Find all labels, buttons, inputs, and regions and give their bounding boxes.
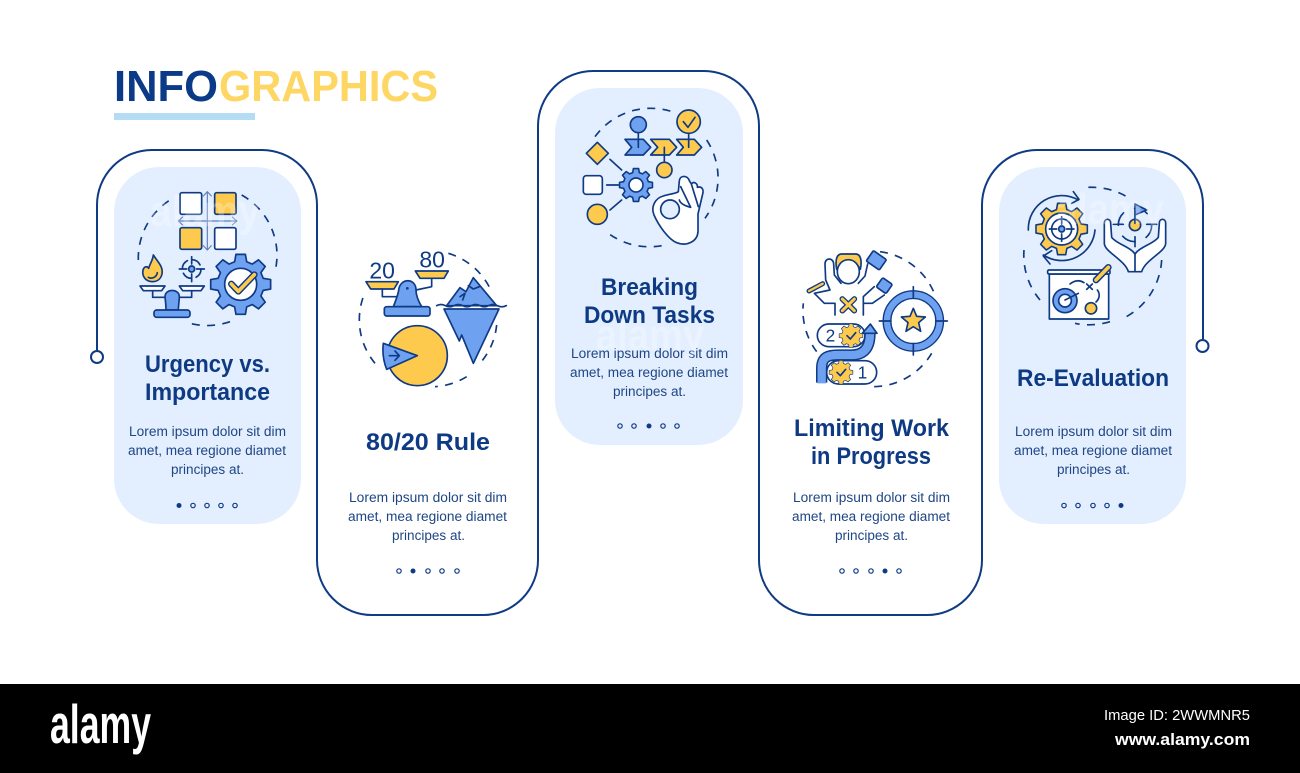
icon: multitasking person, steps and target: 1	[858, 362, 867, 382]
panel: 80/20 rule	[348, 246, 507, 574]
text block: amet, mea regione diamet	[348, 509, 507, 524]
outline end dot	[1196, 340, 1208, 352]
text block: amet, mea regione diamet	[1014, 443, 1172, 458]
footer band	[0, 684, 1300, 773]
text block: Lorem ipsum dolor sit dim	[129, 424, 286, 439]
heading	[794, 415, 950, 470]
text block: Lorem ipsum dolor sit dim	[1015, 424, 1172, 439]
icon: multitasking person, steps and target: 2	[826, 326, 835, 346]
watermarks: alamy	[150, 187, 260, 236]
watermarks: alamy	[596, 311, 704, 360]
title	[114, 62, 438, 111]
text block	[348, 490, 507, 543]
text block: Lorem ipsum dolor sit dim	[793, 490, 950, 505]
text block: amet, mea regione diamet	[128, 443, 286, 458]
text block: Lorem ipsum dolor sit dim	[571, 346, 728, 361]
heading: Urgency vs.	[145, 351, 270, 378]
connecting outline	[97, 71, 1203, 615]
pagination dots	[397, 568, 459, 574]
icon: process flow, gear and ok hand	[583, 108, 718, 247]
text block: principes at.	[1057, 462, 1130, 477]
text block	[570, 346, 728, 399]
panel: urgency vs importance	[114, 167, 301, 524]
text block	[128, 424, 286, 477]
title: GRAPHICS	[219, 62, 438, 111]
image id: Image ID: 2WWMNR5	[1104, 707, 1250, 724]
panel: limiting work in progress	[792, 251, 950, 574]
icon: priority matrix, scale and gear	[138, 192, 277, 326]
pagination dots	[618, 424, 679, 428]
heading: Limiting Work	[794, 415, 950, 442]
icon: scale, pie chart and iceberg: 80	[419, 246, 445, 272]
heading: Breaking	[601, 274, 698, 301]
heading: 80/20 Rule	[366, 429, 490, 456]
heading	[584, 274, 715, 329]
heading: Re-Evaluation	[1017, 365, 1169, 392]
pagination dots	[840, 568, 901, 574]
icon: scale, pie chart and iceberg	[359, 246, 506, 387]
title: INFO	[114, 62, 218, 111]
icon: multitasking person, steps and target	[803, 251, 947, 387]
text block	[1014, 424, 1172, 477]
title underline	[114, 113, 255, 120]
pagination dots	[1062, 503, 1124, 508]
text block: principes at.	[835, 528, 908, 543]
text block: principes at.	[613, 384, 686, 399]
website: www.alamy.com	[1114, 730, 1250, 749]
watermarks	[150, 185, 1164, 360]
text block: amet, mea regione diamet	[570, 365, 728, 380]
text block: amet, mea regione diamet	[792, 509, 950, 524]
heading: Down Tasks	[584, 302, 715, 329]
text block: Lorem ipsum dolor sit dim	[349, 490, 507, 505]
icon: scale, pie chart and iceberg: 20	[369, 257, 395, 283]
heading: Importance	[145, 379, 270, 406]
panel: re-evaluation	[999, 167, 1186, 524]
icon: gear target, hands and strategy board	[1024, 187, 1166, 325]
heading	[145, 351, 270, 406]
panel: breaking down tasks	[555, 88, 743, 445]
pagination dots	[176, 503, 237, 508]
watermarks: alamy	[1056, 185, 1164, 234]
footer logo: alamy	[50, 693, 151, 755]
text block: principes at.	[171, 462, 244, 477]
outline start dot	[91, 351, 103, 363]
text block: principes at.	[392, 528, 465, 543]
text block	[792, 490, 950, 543]
heading: in Progress	[811, 443, 931, 470]
